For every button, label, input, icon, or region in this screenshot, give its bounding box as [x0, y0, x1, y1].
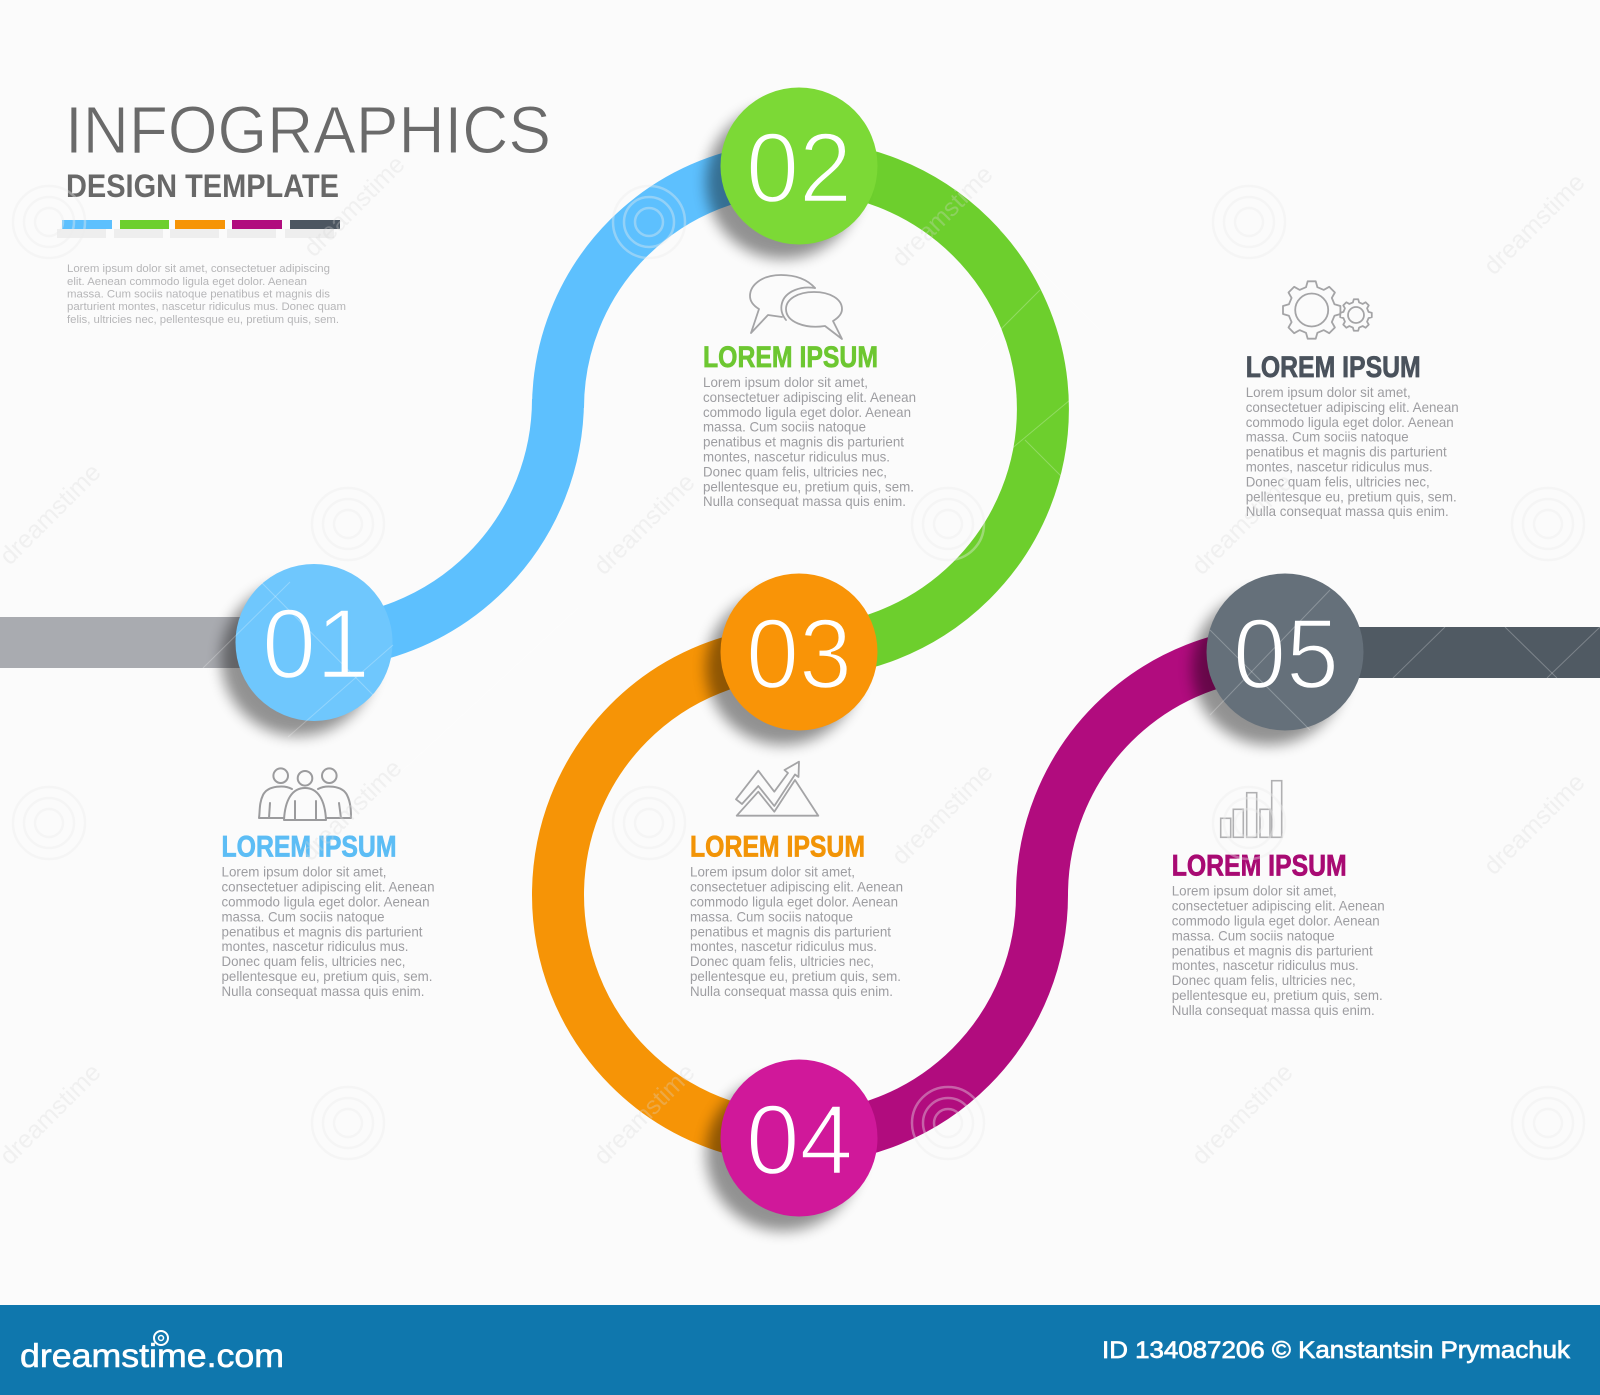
text block 01: Lorem ipsum dolor sit amet,: [222, 865, 386, 880]
text block 01: LOREM IPSUM: [222, 831, 396, 864]
watermark overlay: dreamstime: [886, 160, 998, 272]
icon: mountain with rising arrow: [736, 762, 818, 816]
step circle 05: 05: [1233, 598, 1339, 709]
intro paragraph: massa. Cum sociis natoque penatibus et magnis dis: [67, 288, 330, 300]
watermark overlay: dreamstime: [1186, 1058, 1298, 1170]
text block 02: Donec quam felis, ultricies nec,: [703, 464, 887, 479]
text block 05: Donec quam felis, ultricies nec,: [1172, 973, 1356, 988]
right dark bar: [1280, 627, 1600, 678]
text block 05: [1172, 850, 1385, 1018]
text block 03: Nulla consequat massa quis enim.: [690, 984, 893, 999]
step circle 02: [706, 88, 878, 259]
watermark overlay: dreamstime: [886, 758, 998, 870]
left grey bar: [0, 617, 320, 668]
text block: top right: commodo ligula eget dolor. Aenean: [1246, 415, 1454, 430]
text block 02: Nulla consequat massa quis enim.: [703, 494, 906, 509]
step circle 01: 01: [262, 588, 370, 699]
watermark overlay: dreamstime: [588, 468, 700, 580]
watermark overlay: dreamstime: [298, 150, 410, 262]
intro paragraph: Lorem ipsum dolor sit amet, consectetuer adipiscing: [67, 263, 330, 275]
watermark overlay: [0, 150, 1600, 1170]
text block 01: montes, nascetur ridiculus mus.: [222, 939, 408, 954]
text block 05: Nulla consequat massa quis enim.: [1172, 1003, 1375, 1018]
text block 03: Lorem ipsum dolor sit amet,: [690, 865, 855, 880]
step circle 05: [1192, 574, 1364, 745]
text block 03: pellentesque eu, pretium quis, sem.: [690, 969, 901, 984]
text block 03: penatibus et magnis dis parturient: [690, 924, 891, 939]
text block: top right: Donec quam felis, ultricies nec,: [1246, 474, 1430, 489]
subtitle: design template: DESIGN TEMPLATE: [66, 168, 339, 204]
text block 02: pellentesque eu, pretium quis, sem.: [703, 479, 914, 494]
watermark overlay: dreamstime: [1478, 768, 1590, 880]
text block: top right: Lorem ipsum dolor sit amet,: [1246, 385, 1411, 400]
path segment: purple: [799, 652, 1285, 1138]
text block 02: montes, nascetur ridiculus mus.: [703, 450, 890, 464]
intro paragraph: felis, ultricies nec, pellentesque eu, pretium quis, sem.: [67, 314, 339, 326]
text block 05: penatibus et magnis dis parturient: [1172, 943, 1373, 958]
text block 03: commodo ligula eget dolor. Aenean: [690, 895, 898, 910]
text block 05: massa. Cum sociis natoque: [1172, 928, 1335, 943]
path segment: blue: [314, 168, 798, 643]
step circle 04: 04: [746, 1084, 853, 1195]
text block 03: consectetuer adipiscing elit. Aenean: [690, 880, 903, 895]
text block 01: [222, 831, 434, 999]
icon: gears: [1283, 281, 1372, 339]
intro paragraph: [67, 263, 346, 326]
text block 01: consectetuer adipiscing elit. Aenean: [222, 880, 434, 895]
text block 02: penatibus et magnis dis parturient: [703, 435, 904, 450]
path segment: orange: [558, 652, 799, 1138]
text block 05: Lorem ipsum dolor sit amet,: [1172, 884, 1337, 899]
watermark overlay: dreamstime: [588, 1058, 700, 1170]
text block 02: LOREM IPSUM: [703, 341, 878, 374]
text block 01: massa. Cum sociis natoque: [222, 909, 384, 924]
text block: top right: consectetuer adipiscing elit. Aenean: [1246, 400, 1459, 415]
text block 05: montes, nascetur ridiculus mus.: [1172, 958, 1359, 973]
text block: top right: LOREM IPSUM: [1246, 351, 1421, 384]
text block 01: Nulla consequat massa quis enim.: [222, 984, 424, 999]
text block 03: massa. Cum sociis natoque: [690, 909, 853, 924]
footer logo: dreamstime.com: [20, 1337, 284, 1374]
text block 02: commodo ligula eget dolor. Aenean: [703, 405, 911, 420]
watermark overlay: dreamstime: [1186, 468, 1298, 580]
intro paragraph: elit. Aenean commodo ligula eget dolor. Aenean: [67, 276, 307, 288]
text block 01: pellentesque eu, pretium quis, sem.: [222, 969, 432, 984]
text block 03: montes, nascetur ridiculus mus.: [690, 939, 877, 954]
text block 01: penatibus et magnis dis parturient: [222, 924, 423, 939]
text block 05: LOREM IPSUM: [1172, 850, 1347, 883]
text block 03: [690, 831, 903, 999]
text block 01: Donec quam felis, ultricies nec,: [222, 954, 406, 969]
step circle 03: 03: [746, 598, 852, 709]
text block 03: Donec quam felis, ultricies nec,: [690, 954, 874, 969]
text block 03: LOREM IPSUM: [690, 831, 865, 864]
footer band: [0, 1305, 1600, 1395]
text block 01: commodo ligula eget dolor. Aenean: [222, 895, 430, 910]
intro paragraph: parturient montes, nascetur ridiculus mus. Donec quam: [67, 301, 346, 313]
icon: speech bubbles: [750, 275, 842, 339]
footer credit: ID 134087206 © Kanstantsin Prymachuk: [1102, 1337, 1571, 1364]
text block: top right: [1246, 351, 1459, 519]
text block 02: massa. Cum sociis natoque: [703, 420, 866, 435]
step circle 04: [706, 1060, 878, 1231]
text block 05: commodo ligula eget dolor. Aenean: [1172, 914, 1380, 929]
colour legend bars: [57, 220, 340, 238]
step circle 01: [221, 564, 392, 736]
path segment: green: [798, 166, 1043, 652]
text block 05: consectetuer adipiscing elit. Aenean: [1172, 899, 1385, 914]
icon: bar chart: [1221, 781, 1282, 837]
watermark overlay: dreamstime: [295, 754, 407, 866]
step circle 03: [706, 574, 878, 745]
text block 02: [703, 341, 916, 509]
text block: top right: massa. Cum sociis natoque: [1246, 430, 1409, 445]
watermark overlay: dreamstime: [1478, 168, 1590, 280]
text block: top right: montes, nascetur ridiculus mus.: [1246, 460, 1433, 474]
text block 05: pellentesque eu, pretium quis, sem.: [1172, 988, 1383, 1003]
title: infographics: INFOGRAPHICS: [65, 93, 551, 168]
text block: top right: Nulla consequat massa quis enim.: [1246, 504, 1449, 519]
text block: top right: penatibus et magnis dis parturient: [1246, 445, 1447, 460]
text block: top right: pellentesque eu, pretium quis, sem.: [1246, 489, 1457, 504]
step circle 02: 02: [746, 112, 852, 223]
text block 02: consectetuer adipiscing elit. Aenean: [703, 390, 916, 405]
icon: people: [259, 768, 351, 820]
text block 02: Lorem ipsum dolor sit amet,: [703, 375, 868, 390]
